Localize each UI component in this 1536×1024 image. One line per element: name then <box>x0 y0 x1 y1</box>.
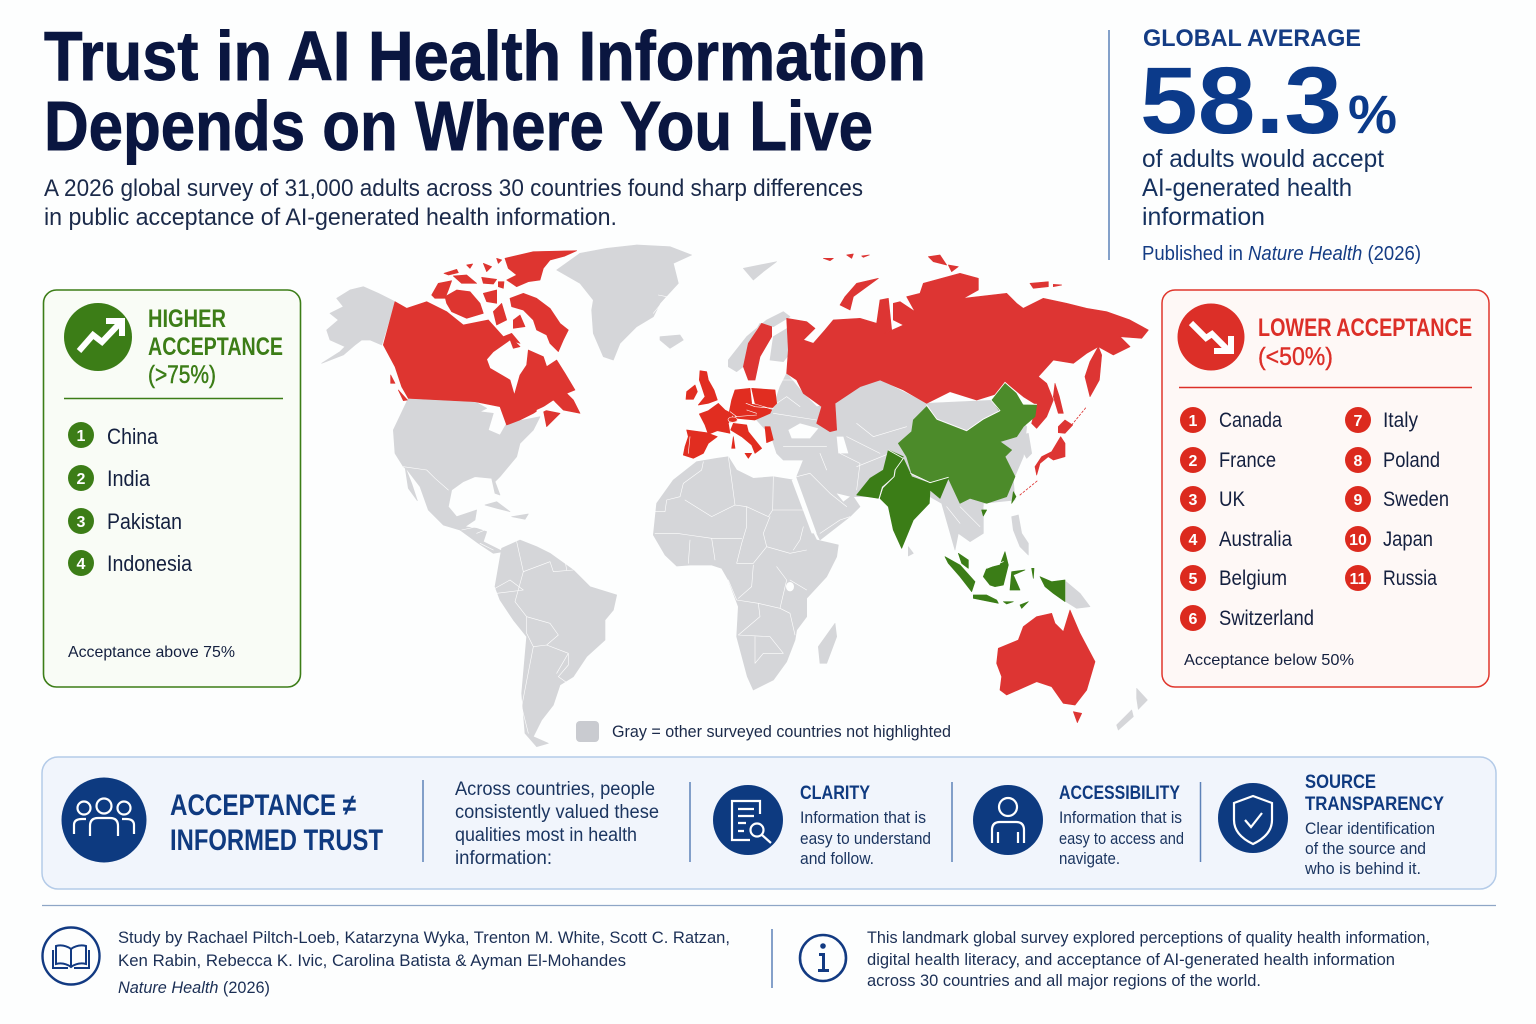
title <box>44 17 926 165</box>
item: accessibility: navigate. <box>1059 850 1120 868</box>
list: higher acceptance countries: 3 <box>77 514 86 531</box>
heading: lower acceptance <box>1258 314 1472 371</box>
panel: lower acceptance <box>1162 290 1489 687</box>
list: lower acceptance countries: 3 <box>1189 492 1198 509</box>
global average callout: GLOBAL AVERAGE <box>1143 25 1361 52</box>
list: lower acceptance countries: UK <box>1219 488 1245 511</box>
heading: higher acceptance: HIGHER <box>148 305 226 333</box>
list: lower acceptance countries: 4 <box>1189 532 1198 549</box>
icon: book <box>42 928 100 984</box>
list: lower acceptance countries: 10 <box>1349 532 1367 549</box>
list: lower acceptance countries: Poland <box>1383 449 1440 472</box>
list: lower acceptance countries: Sweden <box>1383 488 1449 511</box>
item: source transparency: Clear identification <box>1305 820 1435 838</box>
list: lower acceptance countries: Italy <box>1383 409 1418 432</box>
global average callout: of adults would accept <box>1142 145 1384 173</box>
citation <box>118 928 730 997</box>
list: lower acceptance countries: Canada <box>1219 409 1282 432</box>
global average callout: information <box>1142 203 1265 231</box>
item: source transparency: SOURCE <box>1305 772 1376 793</box>
list: higher acceptance countries: 4 <box>77 556 86 573</box>
list: higher acceptance countries: 2 <box>77 471 86 488</box>
item: source transparency: TRANSPARENCY <box>1305 794 1444 815</box>
icon: clarity document <box>713 785 783 855</box>
item: source transparency: of the source and <box>1305 840 1426 858</box>
panel: higher acceptance <box>44 290 300 687</box>
heading: lower acceptance: (<50%) <box>1258 343 1333 371</box>
world map <box>322 245 1148 747</box>
list: higher acceptance countries: 1 <box>77 428 86 445</box>
heading: higher acceptance: ACCEPTANCE <box>148 333 283 361</box>
item: clarity: and follow. <box>800 850 874 868</box>
title: Depends on Where You Live <box>44 87 873 165</box>
list: lower acceptance countries: 7 <box>1354 413 1363 430</box>
heading: higher acceptance <box>148 305 283 389</box>
item: source transparency: who is behind it. <box>1304 860 1421 878</box>
heading: lower acceptance: LOWER ACCEPTANCE <box>1258 314 1472 342</box>
citation: Study by Rachael Piltch-Loeb, Katarzyna Wyka, Trenton M. White, Scott C. Ratzan, <box>118 928 730 947</box>
list: lower acceptance countries: Australia <box>1219 528 1292 551</box>
icon: source transparency shield <box>1218 783 1288 853</box>
item: source transparency <box>1304 772 1444 878</box>
global average callout: Published in Nature Health (2026) <box>1142 243 1421 265</box>
list: higher acceptance countries <box>68 422 193 576</box>
heading: acceptance not equal informed trust <box>170 789 383 857</box>
list: lower acceptance countries <box>1180 407 1449 631</box>
text: qualities intro <box>455 779 659 869</box>
global average callout: AI-generated health <box>1142 174 1352 202</box>
list: lower acceptance countries: 8 <box>1354 453 1363 470</box>
list: lower acceptance countries: Switzerland <box>1219 607 1314 630</box>
subtitle <box>44 175 863 231</box>
heading: acceptance not equal informed trust: INFORMED TRUST <box>170 824 383 857</box>
icon: accessibility person <box>973 785 1043 855</box>
heading: acceptance not equal informed trust: ACCEPTANCE ≠ <box>170 789 356 822</box>
text: qualities intro: information: <box>455 848 552 869</box>
citation: Nature Health (2026) <box>118 978 270 997</box>
list: lower acceptance countries: 2 <box>1189 453 1198 470</box>
icon: trending down <box>1178 304 1244 370</box>
icon: info <box>800 935 846 981</box>
item: clarity <box>800 783 931 868</box>
about the survey <box>867 928 1430 990</box>
list: higher acceptance countries: Pakistan <box>107 509 182 534</box>
list: higher acceptance countries: China <box>107 424 159 449</box>
note: above 75%: Acceptance above 75% <box>68 644 235 661</box>
about the survey: across 30 countries and all major regions of the world. <box>867 971 1261 990</box>
note: below 50%: Acceptance below 50% <box>1184 652 1354 669</box>
list: lower acceptance countries: 11 <box>1350 571 1367 588</box>
list: lower acceptance countries: Japan <box>1383 528 1433 551</box>
item: clarity: CLARITY <box>800 783 870 804</box>
global average callout: 58.3 <box>1140 48 1342 154</box>
list: lower acceptance countries: 5 <box>1189 571 1198 588</box>
subtitle: A 2026 global survey of 31,000 adults across 30 countries found sharp differences <box>44 175 863 202</box>
list: lower acceptance countries: France <box>1219 449 1276 472</box>
subtitle: in public acceptance of AI-generated health information. <box>44 204 617 231</box>
item: accessibility <box>1059 783 1184 868</box>
icon: people <box>62 778 146 862</box>
icon: trending up <box>64 303 132 371</box>
about the survey: digital health literacy, and acceptance of AI-generated health information <box>867 950 1395 969</box>
text: qualities intro: qualities most in health <box>455 825 637 846</box>
text: qualities intro: consistently valued these <box>455 802 659 823</box>
item: accessibility: easy to access and <box>1059 830 1184 848</box>
heading: higher acceptance: (>75%) <box>148 361 216 389</box>
global average callout: % <box>1348 85 1397 145</box>
panel: acceptance vs informed trust <box>42 757 1496 889</box>
legend: gray countries: Gray = other surveyed countries not highlighted <box>612 722 951 741</box>
list: lower acceptance countries: Russia <box>1383 567 1437 590</box>
list: lower acceptance countries: 6 <box>1189 611 1198 628</box>
item: clarity: easy to understand <box>800 830 931 848</box>
item: accessibility: Information that is <box>1059 809 1182 827</box>
text: qualities intro: Across countries, people <box>455 779 655 800</box>
list: lower acceptance countries: 1 <box>1189 413 1198 430</box>
list: lower acceptance countries: Belgium <box>1219 567 1287 590</box>
citation: Ken Rabin, Rebecca K. Ivic, Carolina Batista & Ayman El-Mohandes <box>118 951 626 970</box>
about the survey: This landmark global survey explored perceptions of quality health information, <box>867 928 1430 947</box>
list: higher acceptance countries: India <box>107 466 151 491</box>
title: Trust in AI Health Information <box>44 17 926 95</box>
item: accessibility: ACCESSIBILITY <box>1059 783 1180 804</box>
global average callout <box>1109 25 1421 265</box>
item: clarity: Information that is <box>800 809 926 827</box>
list: lower acceptance countries: 9 <box>1354 492 1363 509</box>
list: higher acceptance countries: Indonesia <box>107 551 193 576</box>
